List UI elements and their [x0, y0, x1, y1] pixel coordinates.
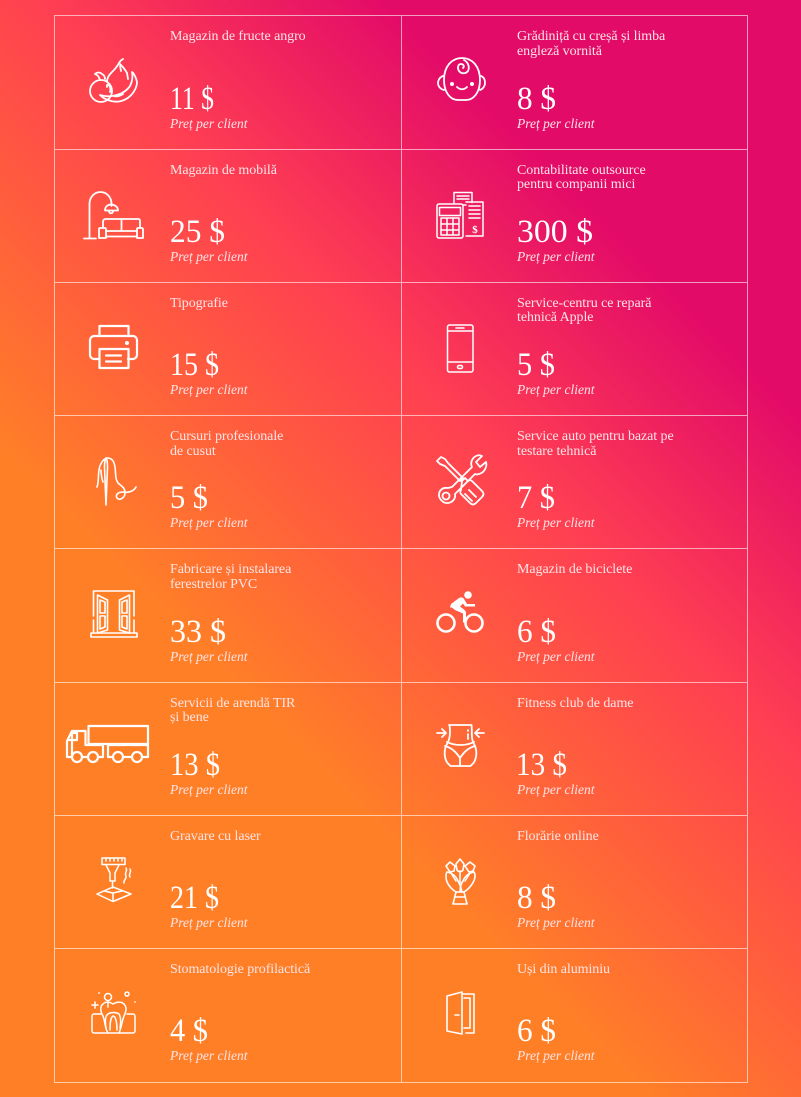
cell: laser engraving: [97, 829, 261, 930]
icon: tooth: [92, 992, 136, 1033]
price: 15 $: [170, 347, 219, 383]
cell: sewing courses: de cusut: [170, 444, 216, 459]
cell: truck rental: și bene: [170, 710, 209, 725]
label: Gravare cu laser: [170, 829, 261, 844]
label: Magazin de mobilă: [170, 163, 278, 178]
price: 25 $: [170, 214, 225, 250]
price: 8 $: [517, 880, 556, 916]
label: Uși din aluminiu: [517, 962, 610, 977]
icon: truck with trailer: [67, 726, 148, 762]
caption: Preț per client: [169, 782, 249, 797]
caption: Preț per client: [516, 116, 596, 131]
cell: PVC windows: ferestrelor PVC: [170, 577, 257, 592]
icon: baby face: [438, 58, 485, 100]
caption: Preț per client: [169, 649, 249, 664]
price: 13 $: [516, 747, 567, 783]
cell: sewing courses: [97, 429, 283, 530]
price: 13 $: [170, 747, 220, 783]
cell: outsourced accounting: [437, 163, 646, 264]
caption: Preț per client: [516, 649, 596, 664]
label: Service-centru ce repară: [517, 296, 652, 311]
cell: print shop: [90, 296, 249, 397]
icon: bouquet: [446, 859, 475, 904]
caption: Preț per client: [169, 515, 249, 530]
caption: Preț per client: [169, 382, 249, 397]
label: Servicii de arendă TIR: [170, 696, 296, 711]
cell: kindergarten: [438, 29, 666, 131]
caption: Preț per client: [516, 249, 596, 264]
icon: needle and thread: [97, 458, 136, 505]
cell: auto service: [437, 429, 674, 530]
label: Fitness club de dame: [517, 696, 633, 711]
caption: Preț per client: [516, 515, 596, 530]
caption: Preț per client: [516, 915, 596, 930]
price: 7 $: [517, 480, 555, 516]
cell: preventive dentistry: [92, 962, 311, 1063]
icon: cyclist: [438, 591, 482, 632]
cell: truck rental: [67, 696, 296, 797]
caption: Preț per client: [516, 1048, 596, 1063]
cell: online florist: [446, 829, 599, 930]
price: 21 $: [170, 880, 219, 916]
icon: laser engraver: [97, 858, 131, 902]
price: 6 $: [517, 1013, 556, 1049]
label: Grădiniță cu creșă și limba: [517, 29, 666, 44]
price: 4 $: [170, 1013, 208, 1049]
label: Stomatologie profilactică: [170, 962, 311, 977]
cell: PVC windows: [91, 562, 292, 664]
price: 5 $: [517, 347, 555, 383]
caption: Preț per client: [169, 116, 249, 131]
price: 11 $: [170, 81, 214, 117]
label: Fabricare și instalarea: [170, 562, 292, 577]
icon detail: dollar sign: $: [472, 224, 478, 236]
caption: Preț per client: [169, 249, 249, 264]
label: Contabilitate outsource: [517, 163, 646, 178]
caption: Preț per client: [169, 915, 249, 930]
cell: auto service: testare tehnică: [517, 444, 597, 459]
icon: waist: [437, 725, 484, 766]
caption: Preț per client: [516, 782, 596, 797]
cell: fruit wholesale store: [90, 29, 306, 131]
icon: open door: [447, 992, 474, 1034]
icon: printer: [90, 326, 137, 368]
icon: open window: [91, 591, 137, 637]
cell: apple repair service: tehnică Apple: [517, 310, 593, 325]
icon: calculator and receipts: [437, 192, 483, 238]
cell: bike shop: [438, 562, 632, 664]
cell: ladies fitness: [437, 696, 633, 797]
icon: lamp and sofa: [84, 192, 143, 238]
caption: Preț per client: [516, 382, 596, 397]
price: 8 $: [517, 81, 556, 117]
cell: kindergarten: engleză vornită: [517, 44, 603, 59]
icon: smartphone: [448, 325, 473, 372]
cell: aluminium doors: [447, 962, 610, 1063]
cell: outsourced accounting: pentru companii mici: [517, 177, 636, 192]
label: Magazin de fructe angro: [170, 29, 306, 44]
icon: fruit: [90, 59, 137, 102]
price: 6 $: [517, 614, 556, 650]
icon: crossed tools: [437, 455, 486, 504]
cell: furniture store: [84, 163, 278, 264]
caption: Preț per client: [169, 1048, 249, 1063]
label: Tipografie: [170, 296, 228, 311]
label: Magazin de biciclete: [517, 562, 632, 577]
cell: apple repair service: [448, 296, 652, 397]
price: 300 $: [517, 214, 593, 250]
label: Florărie online: [517, 829, 599, 844]
price: 33 $: [170, 614, 226, 650]
label: Service auto pentru bazat pe: [517, 429, 674, 444]
price: 5 $: [170, 480, 208, 516]
label: Cursuri profesionale: [170, 429, 283, 444]
